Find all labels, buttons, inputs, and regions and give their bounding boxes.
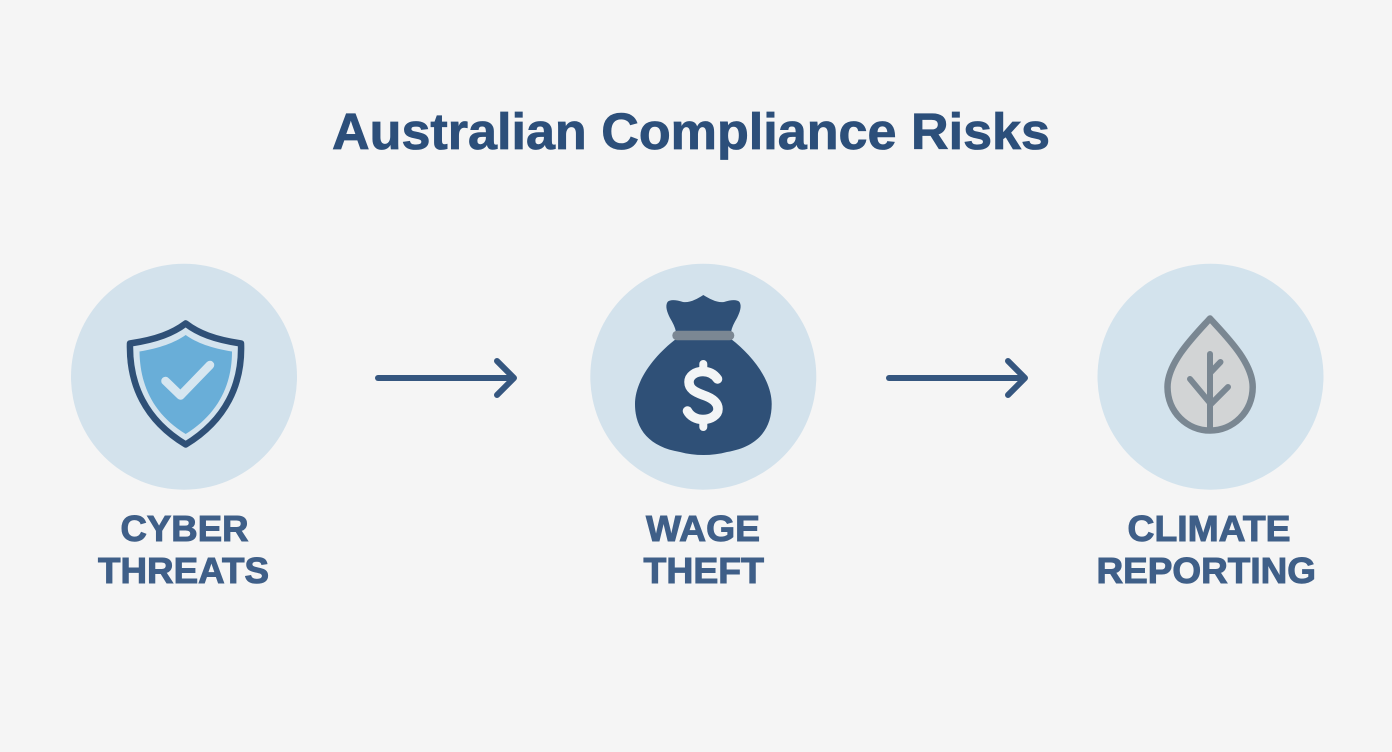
icon: dollar sign: [688, 364, 718, 427]
label: wage theft: WAGE: [646, 508, 760, 549]
icon circle: climate reporting: [1098, 264, 1324, 490]
label: wage theft: [644, 508, 764, 591]
panel: cyber threats: [71, 264, 297, 591]
label: cyber threats: THREATS: [98, 550, 269, 591]
arrow: cyber threats to wage theft: [378, 361, 514, 395]
label: climate reporting: REPORTING: [1096, 550, 1316, 591]
icon: leaf: [1168, 318, 1253, 430]
icon circle: wage theft: [590, 264, 816, 490]
icon: shield with check: [130, 324, 241, 444]
icon: money bag tie band: [672, 331, 734, 340]
title: Australian Compliance Risks: [332, 103, 1050, 160]
icon circle: cyber threats: [71, 264, 297, 490]
label: climate reporting: CLIMATE: [1128, 508, 1290, 549]
panel: wage theft: [590, 264, 816, 591]
label: cyber threats: CYBER: [120, 508, 248, 549]
label: cyber threats: [98, 508, 269, 591]
icon: money bag: [635, 295, 772, 455]
label: wage theft: THEFT: [644, 550, 764, 591]
panel: climate reporting: [1096, 264, 1324, 591]
label: climate reporting: [1096, 508, 1316, 591]
arrow: wage theft to climate reporting: [889, 361, 1025, 395]
